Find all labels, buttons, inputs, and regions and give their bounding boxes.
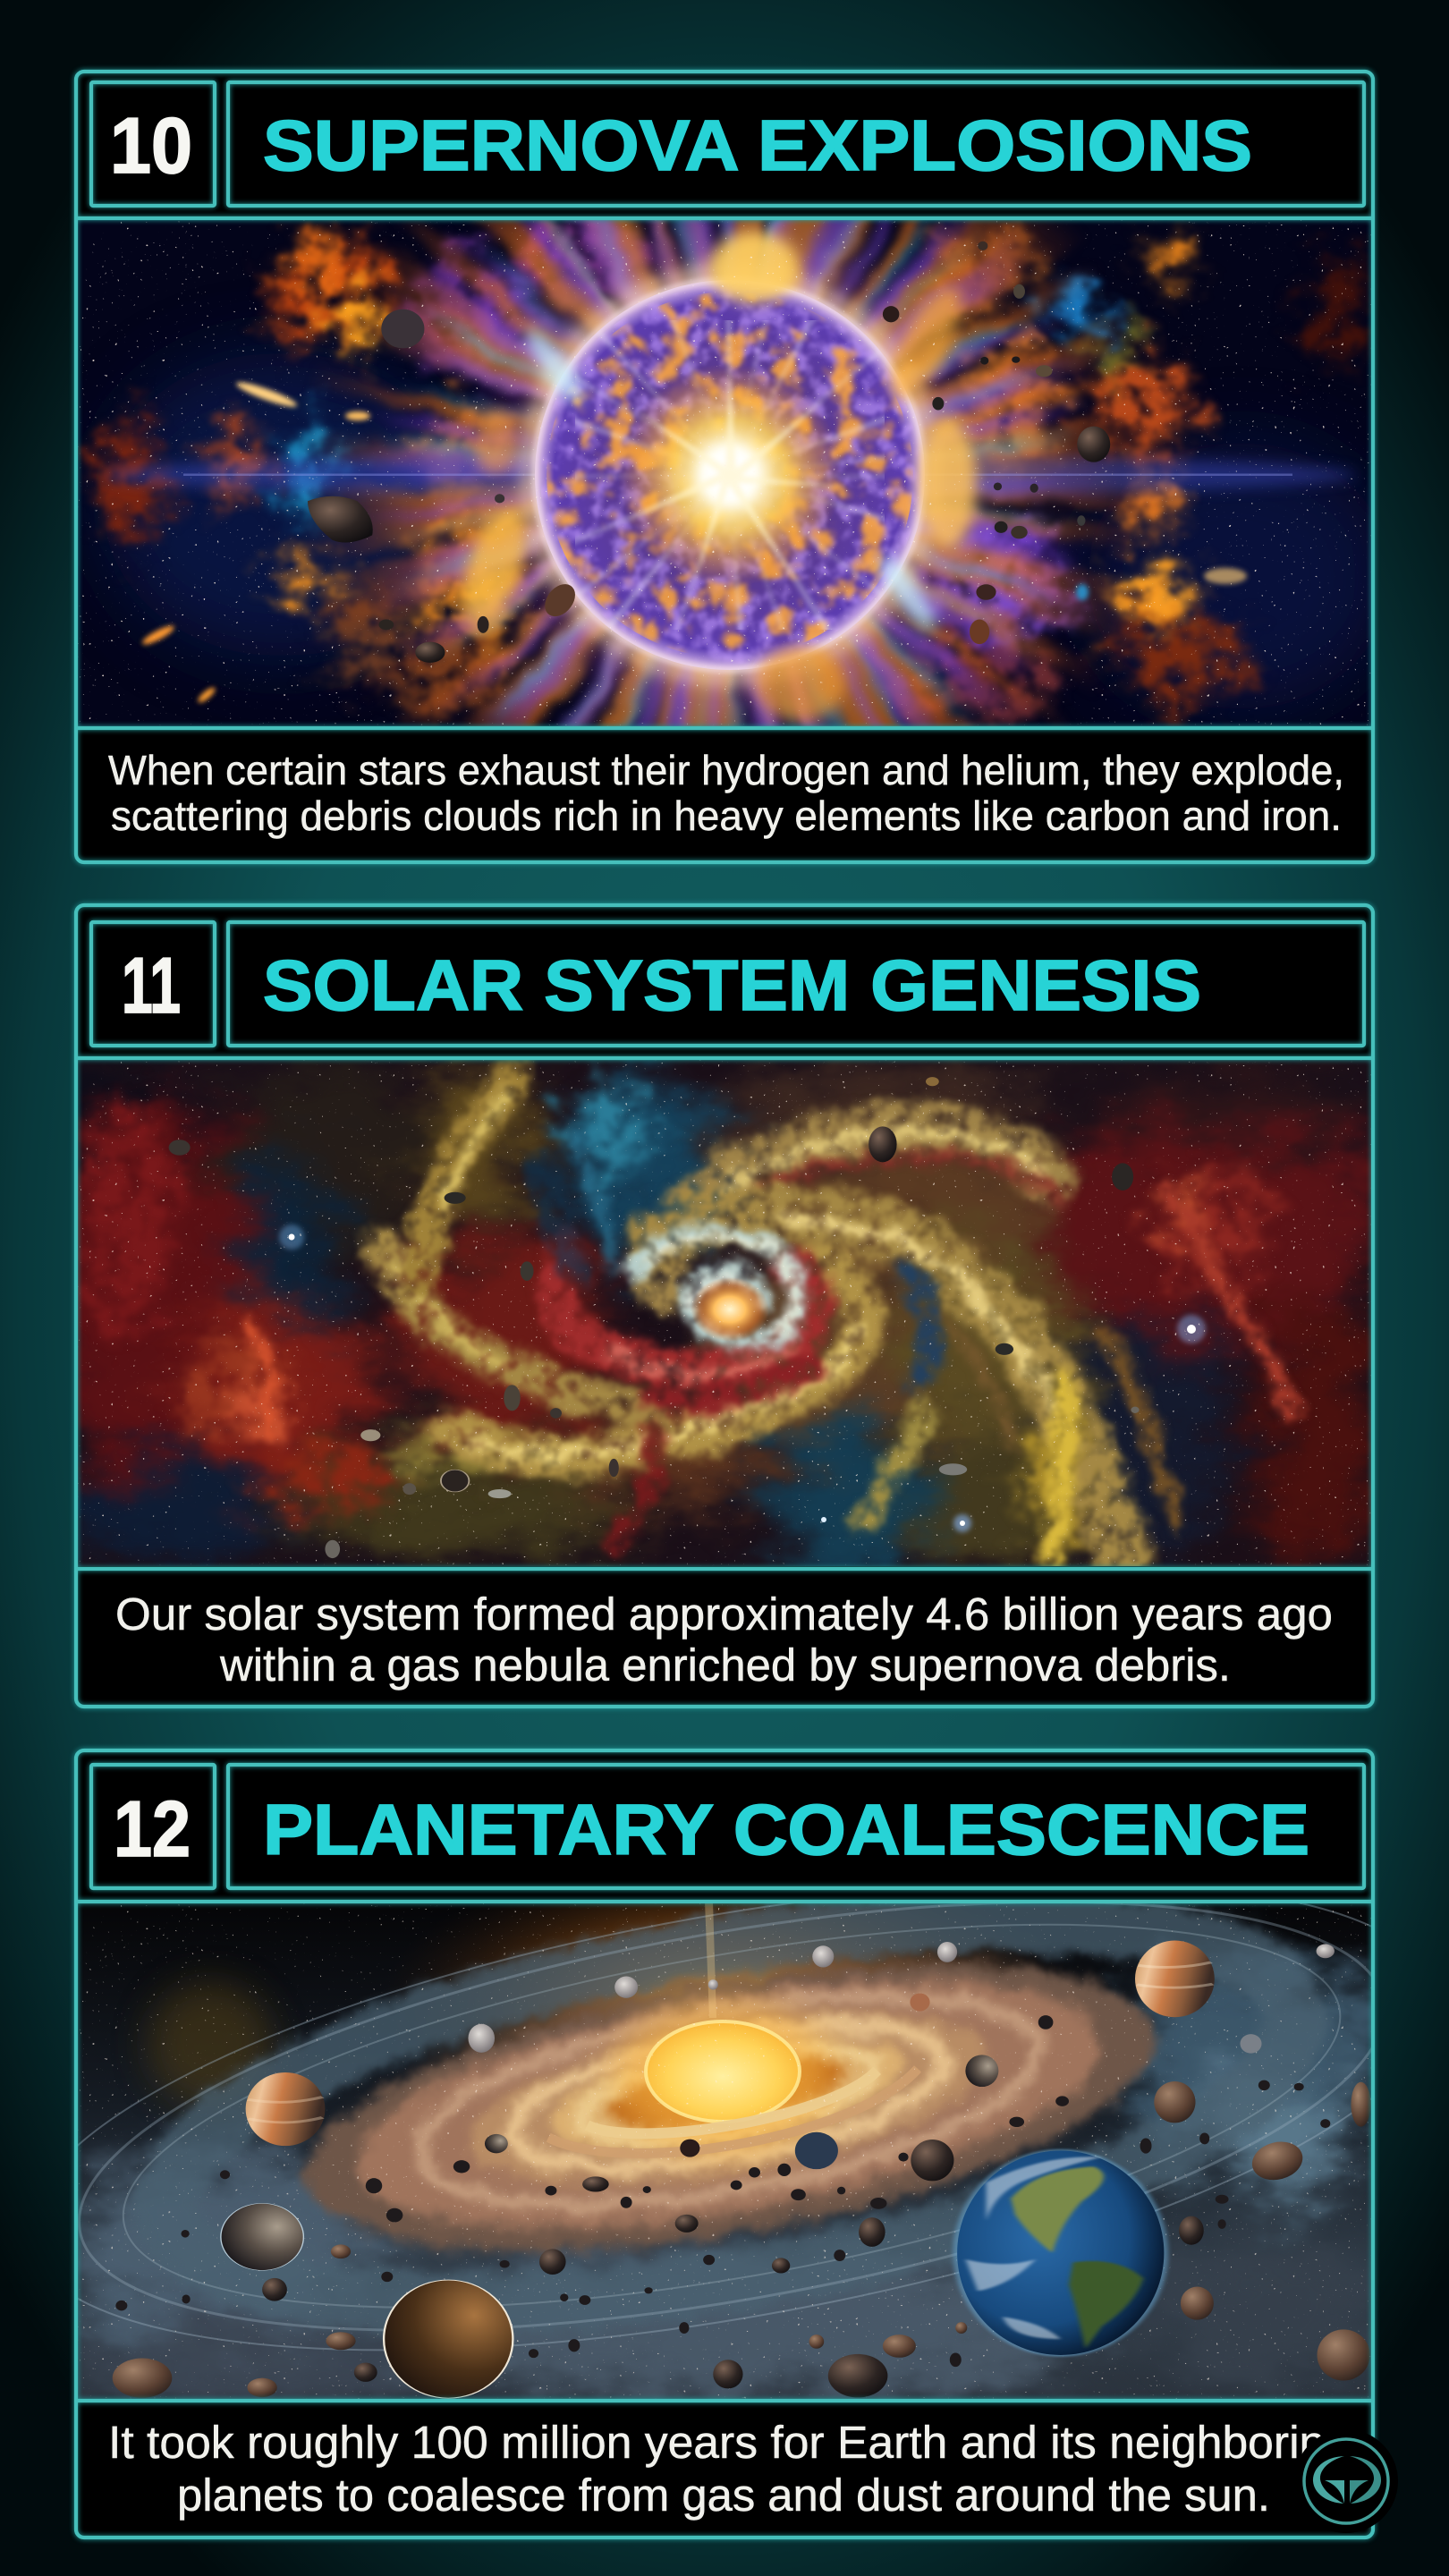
number box 11: 11 xyxy=(122,941,181,1030)
frame lines xyxy=(76,72,1373,862)
lens flare band xyxy=(104,453,1356,496)
description text: scattering debris clouds rich in heavy elements like carbon and iron. xyxy=(111,792,1342,839)
planet: upper right gas giant xyxy=(1135,1941,1215,2017)
panel: 12 planetary coalescence xyxy=(0,1750,1449,2538)
description text: within a gas nebula enriched by supernova debris. xyxy=(219,1640,1231,1690)
spiral arms xyxy=(246,1074,1292,1568)
planet: left gas giant xyxy=(246,2072,325,2146)
description text xyxy=(108,2417,1351,2521)
blue stars xyxy=(279,1224,1206,1532)
image: spiral nebula xyxy=(22,1049,1382,1586)
description text: It took roughly 100 million years for Earth and its neighboring xyxy=(108,2417,1351,2468)
title box xyxy=(228,922,1364,1046)
image: supernova explosion xyxy=(78,220,1371,726)
inner swirl xyxy=(631,1233,797,1342)
star field xyxy=(76,1902,1373,2402)
debris rocks xyxy=(308,242,1110,663)
protoplanetary disk xyxy=(0,1793,1449,2438)
blue dust clouds xyxy=(58,1955,1382,2411)
large rocks xyxy=(113,2081,1371,2398)
description text xyxy=(115,1589,1333,1690)
planets and rocks xyxy=(113,1941,1371,2398)
panel: 10 supernova explosions xyxy=(76,72,1391,862)
description text: When certain stars exhaust their hydrogen and helium, they explode, xyxy=(108,747,1344,793)
panel: 11 solar system genesis xyxy=(22,905,1382,1707)
description text xyxy=(108,747,1344,839)
sun xyxy=(615,1902,830,2152)
front ring over sun xyxy=(547,2063,925,2176)
frame lines xyxy=(76,905,1373,1707)
description text: Our solar system formed approximately 4.6 billion years ago xyxy=(115,1589,1333,1640)
star field xyxy=(76,218,1373,728)
nebula clouds xyxy=(99,218,1369,724)
orange flare sides xyxy=(450,232,977,721)
nebula clouds xyxy=(85,1089,1266,1541)
small moons xyxy=(468,1942,1335,2169)
number box 12 xyxy=(91,1765,215,1888)
number box 12: 12 xyxy=(114,1784,191,1873)
asteroids xyxy=(169,1077,1140,1558)
frame lines xyxy=(76,1750,1373,2538)
small debris xyxy=(115,2015,1330,2367)
title box: SOLAR SYSTEM GENESIS xyxy=(263,945,1201,1025)
exploding sphere xyxy=(530,275,930,675)
planet: brown foreground xyxy=(384,2280,513,2398)
planet: gray rocky xyxy=(221,2203,303,2270)
base colour wash xyxy=(22,1049,1382,1586)
bright core xyxy=(618,363,845,587)
description text: planets to coalesce from gas and dust around the sun. xyxy=(177,2470,1270,2521)
planet: earth xyxy=(953,2149,1168,2357)
title box: PLANETARY COALESCENCE xyxy=(263,1790,1309,1869)
fire chunks xyxy=(140,378,1247,705)
title box: SUPERNOVA EXPLOSIONS xyxy=(263,106,1252,185)
icon: circular logo badge xyxy=(1294,2429,1398,2533)
radiating rays xyxy=(390,135,1070,815)
number box 11 xyxy=(91,922,215,1046)
number box 10: 10 xyxy=(110,101,192,190)
number box 10 xyxy=(91,82,215,206)
star field xyxy=(76,1058,1373,1568)
galactic core xyxy=(691,1277,769,1342)
title box xyxy=(228,82,1364,206)
title box xyxy=(228,1765,1364,1888)
image: forming solar system xyxy=(0,1793,1449,2438)
